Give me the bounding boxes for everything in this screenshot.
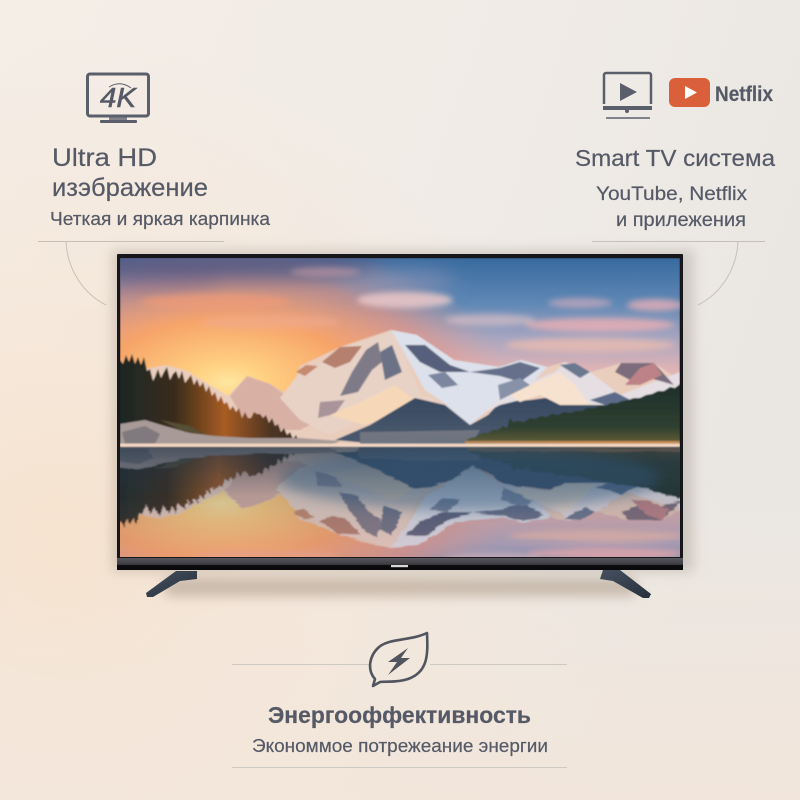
divider line right: [592, 240, 765, 242]
tv logo: [391, 565, 408, 567]
heading: Ultra HD: Ultra HD: [52, 144, 157, 172]
icon: play screen: [603, 73, 652, 118]
heading: изэбражение: изэбражение: [52, 174, 208, 202]
tv bezel: [117, 254, 683, 570]
divider top: [232, 664, 567, 666]
callout: smart tv: [575, 73, 775, 305]
tv floor shadow: [165, 578, 635, 596]
callout: ultra hd: [38, 74, 271, 305]
lake reflection: [120, 446, 680, 557]
icon: 4K monitor: 4K: [100, 82, 137, 113]
subtext: apps line 2: и прилежения: [616, 210, 746, 231]
heading: energy efficiency: Энергооффективность: [268, 702, 531, 728]
subtext: energy: Экономмое потрежеание энергии: [252, 736, 548, 756]
tv stand right: [600, 570, 651, 598]
tv bottom bar: [117, 558, 683, 570]
sky and mountains: [120, 258, 680, 448]
television: [117, 254, 683, 598]
subtext: picture: Четкая и яркая карпинка: [50, 209, 271, 229]
divider bottom: [232, 766, 567, 768]
curve right: [698, 241, 738, 305]
icon: leaf bolt: [370, 633, 427, 686]
curve left: [66, 241, 106, 305]
tv wall shadow: [112, 250, 694, 572]
callout: energy: [232, 633, 567, 768]
divider line left: [38, 240, 224, 242]
tv screen: mountain lake: [120, 258, 680, 557]
horizon glow: [120, 444, 680, 447]
subtext: apps line 1: YouTube, Netflix: [596, 184, 748, 205]
water tint: [120, 446, 680, 557]
netflix label: Netflix: [715, 83, 773, 106]
heading: smart tv: Smart TV система: [575, 145, 775, 171]
icon: youtube: [669, 78, 710, 107]
tv stand left: [146, 571, 197, 597]
icon: 4K monitor: [88, 74, 148, 123]
reflection blue tint: [280, 446, 660, 510]
